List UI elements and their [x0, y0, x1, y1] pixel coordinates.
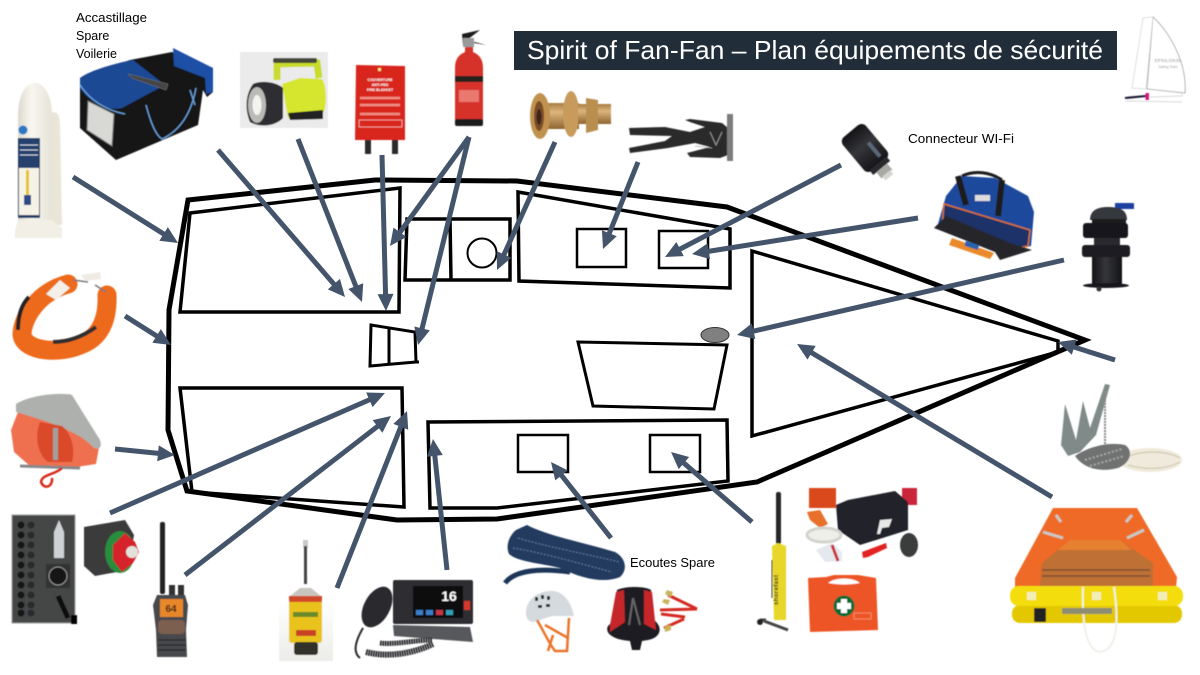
arrow: transducer to ellipse — [752, 260, 1064, 332]
arrow: wifi connector to locker 2 — [678, 165, 841, 250]
icon: life raft — [1010, 508, 1183, 652]
label: bag contents: Voilerie — [76, 47, 117, 61]
icon: grab bag kit — [807, 488, 918, 562]
locker 3 — [518, 435, 568, 472]
icon: lifesling tube — [15, 83, 62, 238]
saloon table — [578, 342, 727, 409]
icon: black spare parts bag — [80, 48, 213, 160]
arrow: anchor to bow — [1072, 346, 1115, 360]
icon: handheld VHF: 64 — [165, 604, 177, 615]
arrow: lifesling to pushpit — [73, 177, 165, 235]
hull outline — [168, 180, 1085, 520]
icon: handheld VHF — [153, 522, 188, 657]
icon: EPIRB beacon — [279, 540, 333, 661]
arrow: through-hull to sink — [503, 142, 555, 256]
arrow: extinguisher to galley — [399, 137, 469, 234]
icon: fire extinguisher — [455, 30, 486, 126]
icon: fire blanket: COUVERTURE — [367, 78, 393, 82]
icon: rescue throw-line buoy — [757, 492, 788, 630]
icon: lifejacket with tether — [607, 587, 697, 650]
arrow: horseshoe to hull — [125, 316, 158, 337]
arrow: EPIRB to compartment — [337, 425, 402, 588]
port saloon berth — [518, 192, 730, 288]
icon: wifi connector — [839, 122, 901, 187]
logo: Epsilon30 Sailing Team: EPSILON30 — [1155, 58, 1181, 63]
logo: Epsilon30 Sailing Team — [1125, 17, 1185, 102]
arrow: extinguisher to steps — [422, 137, 469, 330]
icon: fire blanket — [355, 65, 405, 154]
icon: battery switch — [84, 520, 139, 576]
arrow: searchlight to cockpit locker — [298, 139, 356, 288]
transducer location — [701, 328, 729, 342]
icon: fixed VHF radio — [355, 580, 473, 658]
icon: anchor and rode — [1061, 384, 1182, 472]
icon: bronze through-hull — [530, 91, 611, 139]
arrow: rope and helmet to locker 3 — [560, 474, 611, 538]
logo: Epsilon30 Sailing Team: Sailing Team — [1158, 65, 1178, 69]
label: spare sheets: Ecoutes Spare — [630, 556, 715, 570]
icon: fire blanket: FIRE BLANKET — [367, 88, 394, 92]
starboard aft compartment — [180, 388, 404, 507]
galley block — [405, 219, 510, 280]
sink — [468, 238, 496, 268]
icon: helmet — [526, 591, 574, 651]
arrow: safety kit to locker 4 — [682, 462, 752, 522]
arrow: spare bag to cockpit locker — [218, 150, 335, 286]
title banner: Spirit of Fan-Fan – Plan équipements de sécurité — [527, 35, 1103, 65]
arrow: tool bag to locker 2 — [707, 218, 918, 252]
icon: rescue throw-line buoy: shorefast — [774, 575, 780, 605]
boat plan — [168, 180, 1085, 520]
icon: coiled rope — [505, 525, 625, 583]
icon: tool bag — [934, 173, 1034, 260]
forepeak — [752, 251, 1058, 436]
locker 2 — [659, 231, 708, 268]
arrow: fixed VHF to berth — [435, 454, 447, 570]
icon: depth transducer — [1082, 203, 1134, 292]
label: bag contents — [76, 11, 147, 61]
arrow: life raft to forepeak — [810, 352, 1052, 497]
icon: fixed VHF radio: 16 — [441, 588, 457, 604]
arrows — [73, 137, 1115, 588]
label: bag contents: Accastillage — [76, 11, 147, 25]
locker 1 — [577, 229, 626, 267]
starboard saloon berth — [428, 420, 728, 508]
port aft compartment — [180, 188, 400, 312]
arrow: fire blanket to locker — [382, 155, 386, 296]
icon: electrical switch panel — [12, 515, 77, 624]
arrow: lifebuoy to hull — [115, 449, 160, 454]
icon: horseshoe lifebuoy pack — [11, 394, 101, 487]
icon: searchlight — [240, 52, 328, 128]
icon: first aid kit — [808, 575, 878, 632]
label: wifi connector: Connecteur WI-Fi — [908, 132, 1014, 146]
icon: rescue horseshoe sling — [18, 272, 107, 350]
arrow: handheld VHF to compartment — [185, 425, 379, 575]
companionway steps — [370, 325, 419, 366]
locker 4 — [650, 435, 700, 472]
label: bag contents: Spare — [76, 29, 109, 43]
icon: survival suit — [629, 114, 733, 161]
arrow: suit to locker 1 — [609, 162, 638, 235]
arrow: electrical panel to compartment — [110, 399, 371, 513]
icon: fire blanket: ANTI-FEU — [372, 83, 389, 87]
